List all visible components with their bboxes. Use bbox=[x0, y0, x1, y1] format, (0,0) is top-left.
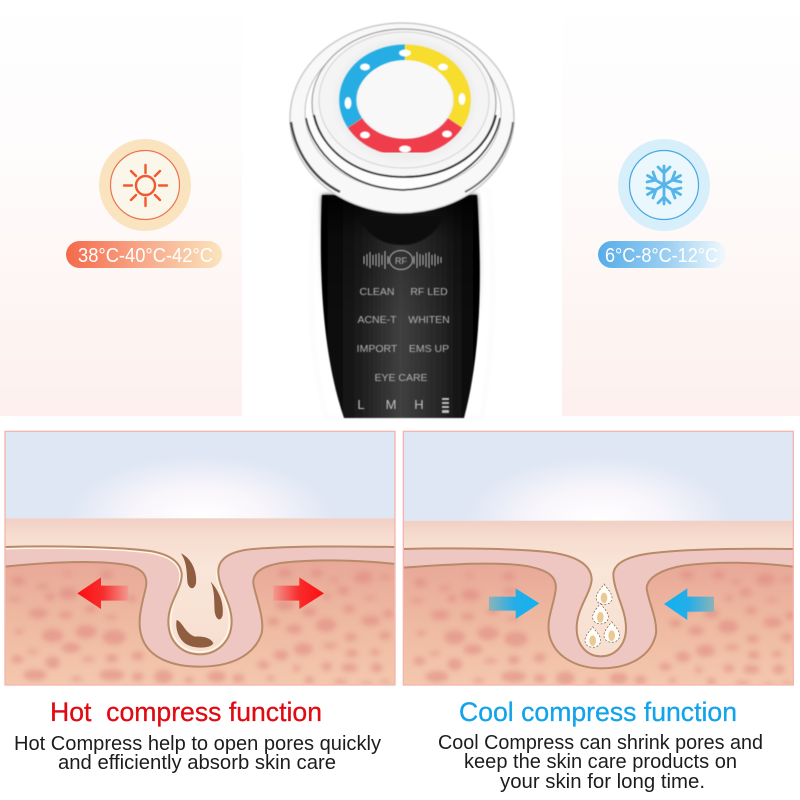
mode labels: CLEAN bbox=[359, 286, 395, 298]
skin care droplets bbox=[585, 584, 620, 647]
device: beauty instrument bbox=[290, 23, 514, 418]
text block: hot compress description: Hot Compress help to open pores quickly bbox=[14, 733, 381, 755]
dirt in pore bbox=[176, 553, 223, 648]
RF logo: RF bbox=[395, 256, 407, 266]
tissue spots bbox=[8, 569, 394, 685]
text block: hot compress description: and efficiently absorb skin care bbox=[58, 752, 336, 774]
level labels: H bbox=[414, 397, 424, 412]
sky area bbox=[5, 432, 395, 518]
panel border bbox=[403, 431, 793, 685]
arrow: heat outward right bbox=[273, 577, 324, 609]
mode labels: ACNE-T bbox=[357, 314, 397, 326]
mode labels: RF LED bbox=[410, 286, 448, 298]
skin outlines bbox=[5, 546, 395, 667]
device control screen bbox=[321, 195, 481, 418]
level labels: L bbox=[357, 397, 365, 412]
panel: cool compress skin diagram bbox=[403, 431, 796, 687]
text block: hot compress description bbox=[14, 733, 381, 774]
panel border bbox=[5, 431, 395, 685]
skin surface layer bbox=[403, 521, 793, 685]
arrow: heat outward left bbox=[77, 577, 128, 609]
hot temperature pill: 38°C-40°C-42°C bbox=[78, 245, 213, 267]
device head bbox=[290, 23, 514, 213]
cold temperature badge bbox=[598, 139, 726, 268]
arrow: cooling inward left bbox=[489, 588, 539, 619]
icon: snowflake bbox=[618, 139, 710, 231]
mode labels: EMS UP bbox=[409, 343, 449, 355]
text block: cool compress description: Cool Compress can shrink pores and bbox=[438, 732, 763, 754]
tissue spots bbox=[410, 571, 796, 687]
device body casing bbox=[311, 190, 493, 418]
RF logo bbox=[364, 250, 441, 270]
text block: cool compress description bbox=[438, 732, 763, 793]
mode labels: EYE CARE bbox=[374, 372, 428, 384]
cold temperature pill: 6°C-8°C-12°C bbox=[605, 245, 718, 267]
epidermis layer bbox=[5, 546, 395, 685]
hot temperature badge bbox=[66, 139, 222, 268]
epidermis layer bbox=[403, 548, 793, 685]
icon: sun bbox=[99, 139, 191, 231]
heading: cool compress function: Cool compress function bbox=[459, 697, 737, 727]
heading: hot compress function: Hot compress function bbox=[50, 697, 322, 727]
panel: hot compress skin diagram bbox=[5, 431, 395, 685]
text block: cool compress description: keep the skin care products on bbox=[464, 751, 737, 773]
arrow: cooling inward right bbox=[664, 588, 714, 620]
level labels bbox=[357, 397, 449, 413]
mode labels bbox=[357, 286, 450, 384]
sky area bbox=[403, 432, 793, 521]
level labels: M bbox=[386, 397, 396, 412]
skin outlines bbox=[403, 548, 793, 668]
dermis layer bbox=[5, 560, 395, 685]
text block: cool compress description: your skin for long time. bbox=[500, 771, 705, 793]
mode labels: WHITEN bbox=[408, 314, 450, 326]
skin surface layer bbox=[5, 518, 395, 685]
mode labels: IMPORT bbox=[357, 343, 398, 355]
light ring bbox=[344, 50, 466, 152]
dermis layer bbox=[403, 563, 793, 685]
